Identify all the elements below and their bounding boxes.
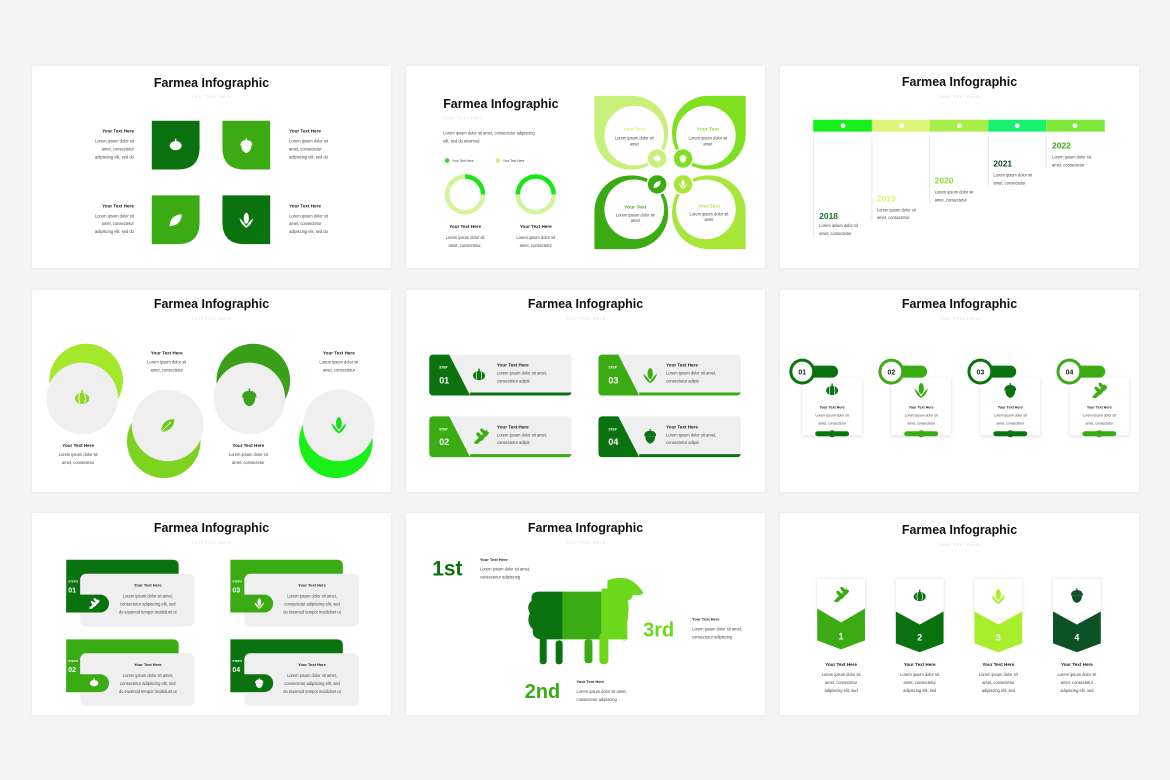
- text blocks: Lorem ipsum dolor sit: [95, 139, 135, 144]
- 1st label: Your Text Here: [480, 557, 508, 562]
- 3rd label: Your Text Here: [692, 616, 720, 621]
- year descriptions: amet, consectetur: [935, 197, 968, 202]
- legend: Your Text Here: [503, 159, 525, 163]
- title: [154, 521, 269, 545]
- step 03: 03: [232, 588, 240, 595]
- tile: leaf: [152, 195, 200, 244]
- badge 3: amet, consectetur: [982, 680, 1015, 685]
- card 03: 03: [608, 376, 618, 386]
- slide 5: step cards: [406, 290, 765, 492]
- step 01: [66, 560, 195, 626]
- donut 2: [518, 176, 554, 212]
- badge 2: Your Text Here: [904, 662, 936, 667]
- item 04: Your Text Here: [1087, 405, 1112, 409]
- flower: [594, 96, 746, 249]
- flower: Your Text: [624, 204, 647, 210]
- intro text: [443, 131, 535, 144]
- title: Your Text Here: [565, 316, 606, 321]
- card 02: 02: [439, 437, 449, 447]
- 2nd label: Your Text Here: [577, 679, 605, 684]
- card 04: Lorem ipsum dolor sit amet,: [666, 432, 716, 437]
- card 01: 01: [439, 376, 449, 386]
- text blocks: Lorem ipsum dolor sit: [95, 213, 135, 218]
- card 02: Your Text Here: [497, 424, 529, 429]
- item 01: [791, 360, 862, 437]
- labels: Lorem ipsum dolor sit: [59, 452, 98, 457]
- years: 2022: [1052, 141, 1071, 151]
- slide 1: leaf tiles: Lorem ipsum dolor sit: [289, 213, 329, 218]
- circle 1: [46, 344, 123, 434]
- card 04: [598, 416, 741, 457]
- badge 2: 2: [917, 632, 922, 642]
- labels: Your Text Here: [62, 443, 95, 448]
- 1st label: 1st: [432, 558, 462, 581]
- title: [154, 76, 269, 99]
- title: [528, 297, 643, 321]
- year descriptions: amet, consectetur: [993, 180, 1026, 185]
- donut labels: Lorem ipsum dolor sit: [446, 235, 485, 240]
- badge 1: adipiscing elit, sed: [824, 688, 858, 693]
- year descriptions: Lorem ipsum dolor sit: [935, 189, 974, 194]
- title: Farmea Infographic: [154, 521, 269, 535]
- year descriptions: amet, consectetur: [819, 231, 852, 236]
- card 02: Lorem ipsum dolor sit amet,: [497, 432, 547, 437]
- year descriptions: Lorem ipsum dolor sit: [877, 207, 917, 212]
- title: [154, 297, 269, 321]
- flower: Lorem ipsum dolor sit: [688, 136, 728, 141]
- title: [443, 97, 559, 121]
- badge 3: adipiscing elit, sed: [982, 688, 1015, 693]
- legend: [445, 158, 525, 163]
- 3rd label: Lorem ipsum dolor sit amet,: [692, 626, 742, 631]
- title: [902, 75, 1017, 99]
- years: 2020: [935, 175, 954, 185]
- item 02: Your Text Here: [909, 405, 934, 409]
- donut labels: Your Text Here: [520, 224, 552, 229]
- step 04: Your Text Here: [298, 662, 327, 667]
- slide 8: sheep ranking: [406, 513, 765, 715]
- text blocks: Your Text Here: [102, 129, 134, 134]
- text blocks: amet, consectetur: [102, 147, 135, 152]
- title: Farmea Infographic: [154, 297, 269, 311]
- slide 1: leaf tiles: Your Text Here: [289, 203, 321, 208]
- slide 1: leaf tiles: [32, 66, 391, 268]
- labels: Your Text Here: [323, 351, 355, 356]
- badge 2: adipiscing elit, sed: [903, 688, 936, 693]
- slide 1: leaf tiles: amet, consectetur: [289, 221, 322, 226]
- flower: Lorem ipsum dolor sit: [616, 212, 656, 217]
- step 01: Your Text Here: [134, 583, 162, 588]
- item 01: 01: [798, 370, 806, 377]
- donut 1: [447, 176, 483, 212]
- circle 4: [299, 390, 375, 478]
- slide 9: chevron badges: [780, 513, 1139, 715]
- step 03: do eiusmod tempor incididunt ut: [283, 610, 342, 615]
- labels: amet, consectetur: [232, 460, 265, 465]
- badge 1: [817, 579, 865, 693]
- labels: Your Text Here: [151, 351, 183, 356]
- card 03: consectetur adipis: [666, 379, 699, 384]
- card 03: Your Text Here: [666, 363, 698, 368]
- title: Your Text Here: [443, 116, 484, 121]
- slide 1: leaf tiles: adipiscing elit, sed do: [289, 155, 329, 160]
- title: Your Text Here: [939, 542, 980, 547]
- step 04: consectetur adipiscing elit, sed: [284, 681, 340, 686]
- card 03: [598, 355, 741, 395]
- labels: amet, consectetur: [323, 368, 356, 373]
- item 04: amet, consectetur: [1086, 421, 1114, 425]
- step 03: STEPS: [232, 580, 242, 584]
- title: Farmea Infographic: [902, 75, 1017, 89]
- 2nd label: 2nd: [525, 681, 560, 703]
- title: Farmea Infographic: [902, 297, 1017, 311]
- step 01: STEPS: [68, 580, 78, 584]
- card 01: [429, 355, 572, 395]
- item 01: Lorem ipsum dolor sit: [816, 413, 849, 417]
- slide 1: leaf tiles: amet, consectetur: [289, 147, 322, 152]
- flower: amet: [630, 142, 640, 147]
- slide 3: timeline: [780, 66, 1139, 268]
- card 02: [429, 416, 572, 457]
- badge 4: 4: [1074, 632, 1079, 642]
- circle 3: [213, 344, 290, 434]
- step 01: consectetur adipiscing elit, sed: [120, 602, 175, 607]
- title: Your Text Here: [191, 316, 232, 321]
- step 02: Lorem ipsum dolor sit amet,: [123, 673, 173, 678]
- flower: amet: [704, 217, 714, 222]
- badge 1: Lorem ipsum dolor sit: [822, 672, 861, 677]
- card 04: Your Text Here: [666, 424, 698, 429]
- badge 2: amet, consectetur: [904, 680, 936, 685]
- card 02: consectetur adipis: [497, 440, 530, 445]
- flower: Your Text: [698, 203, 720, 209]
- 1st label: consectetur adipiscing: [480, 575, 520, 580]
- title: Your Text Here: [191, 540, 232, 545]
- step 01: 01: [68, 588, 76, 595]
- step 02: consectetur adipiscing elit, sed: [120, 681, 175, 686]
- timeline bar: [813, 120, 1105, 132]
- flower: Lorem ipsum dolor sit: [615, 136, 655, 141]
- intro text: Lorem ipsum dolor sit amet, consectetur adipiscing: [443, 131, 535, 136]
- step 03: Lorem ipsum dolor sit amet,: [287, 594, 337, 599]
- title: [902, 297, 1017, 321]
- labels: amet, consectetur: [62, 460, 95, 465]
- labels: [59, 351, 359, 465]
- step 03: [230, 560, 359, 626]
- legend: Your Text Here: [452, 159, 474, 163]
- 1st label: Lorem ipsum dolor sit amet,: [480, 567, 530, 572]
- card 04: STEP: [608, 427, 618, 431]
- badge 1: Your Text Here: [825, 662, 857, 667]
- labels: Lorem ipsum dolor sit: [229, 452, 269, 457]
- slide 1: leaf tiles: Your Text Here: [289, 129, 321, 134]
- donut labels: amet, consectetur,: [448, 243, 482, 248]
- title: Your Text Here: [939, 316, 980, 321]
- item 02: amet, consectetur: [907, 421, 936, 425]
- year descriptions: [819, 155, 1092, 236]
- 2nd label: Lorem ipsum dolor sit amet,: [577, 689, 627, 694]
- slide 4: circles: [32, 290, 391, 492]
- donut labels: Lorem ipsum dolor sit: [516, 235, 556, 240]
- step 02: Your Text Here: [134, 662, 162, 667]
- labels: Lorem ipsum dolor sit: [319, 360, 359, 365]
- step 03: Your Text Here: [298, 583, 327, 588]
- 3rd label: consectetur adipiscing: [692, 634, 732, 639]
- slide 1: leaf tiles: adipiscing elit, sed do: [289, 229, 329, 234]
- step 04: STEPS: [232, 659, 242, 663]
- slide 7: stacked step cards: [32, 513, 391, 715]
- badge 4: adipiscing elit, sed: [1060, 688, 1094, 693]
- year descriptions: Lorem ipsum dolor sit: [819, 223, 859, 228]
- item 03: [969, 360, 1040, 437]
- step 03: consectetur adipiscing elit, sed: [284, 602, 340, 607]
- years: 2018: [819, 211, 838, 221]
- card 03: Lorem ipsum dolor sit amet,: [666, 371, 716, 376]
- step 02: STEPS: [68, 659, 78, 663]
- card 01: Your Text Here: [497, 363, 529, 368]
- step 04: do eiusmod tempor incididunt ut: [283, 689, 342, 694]
- step 04: [230, 639, 359, 706]
- title: [528, 521, 643, 545]
- badge 3: 3: [996, 632, 1001, 642]
- timeline lines: [813, 136, 1046, 238]
- card 01: STEP: [439, 366, 449, 370]
- title: Farmea Infographic: [528, 521, 643, 535]
- flower: Your Text: [623, 127, 646, 133]
- 1st label: [432, 557, 530, 581]
- item 02: [880, 360, 951, 437]
- slide 6: numbered pins: [780, 290, 1139, 492]
- item 01: amet, consectetur: [818, 421, 847, 425]
- year descriptions: Lorem ipsum dolor sit: [993, 172, 1033, 177]
- labels: Your Text Here: [232, 443, 265, 448]
- step 04: Lorem ipsum dolor sit amet,: [287, 673, 337, 678]
- tile: acorn: [222, 121, 270, 169]
- item 02: 02: [887, 370, 895, 377]
- year descriptions: Lorem ipsum dolor sit: [1052, 155, 1092, 160]
- title: Farmea Infographic: [154, 76, 269, 90]
- 3rd label: [643, 616, 742, 641]
- years: 2021: [993, 159, 1012, 169]
- year descriptions: amet, consectetur: [1052, 163, 1085, 168]
- slide 2: flower & donuts: [406, 66, 765, 268]
- labels: Lorem ipsum dolor sit: [147, 360, 187, 365]
- item 02: Lorem ipsum dolor sit: [905, 413, 938, 417]
- text blocks: Your Text Here: [102, 203, 134, 208]
- step 02: do eiusmod tempor incididunt ut: [119, 689, 177, 694]
- 3rd label: 3rd: [643, 619, 674, 641]
- slide 1: leaf tiles: Lorem ipsum dolor sit: [289, 139, 329, 144]
- 2nd label: consectetur adipiscing: [577, 697, 617, 702]
- badge 3: Your Text Here: [982, 662, 1015, 667]
- badge 3: [974, 579, 1022, 693]
- item 03: 03: [977, 370, 984, 377]
- text blocks: [95, 129, 135, 234]
- badge 2: Lorem ipsum dolor sit: [900, 672, 940, 677]
- item 04: Lorem ipsum dolor sit: [1083, 413, 1116, 417]
- title: Farmea Infographic: [528, 297, 643, 311]
- title: Farmea Infographic: [443, 97, 559, 111]
- donut labels: [446, 224, 556, 248]
- donut labels: amet, consectetur: [520, 243, 553, 248]
- badge 4: Lorem ipsum dolor sit: [1057, 672, 1097, 677]
- tile: corn: [222, 195, 270, 244]
- tile: pumpkin: [152, 121, 200, 169]
- step 04: 04: [232, 667, 240, 674]
- sheep: [528, 578, 643, 664]
- title: Your Text Here: [565, 540, 606, 545]
- years: 2019: [877, 193, 896, 203]
- item 03: Lorem ipsum dolor sit: [994, 413, 1027, 417]
- badge 1: 1: [839, 631, 844, 641]
- item 01: Your Text Here: [820, 405, 845, 409]
- flower: amet: [631, 218, 641, 223]
- badge 3: Lorem ipsum dolor sit: [979, 672, 1019, 677]
- labels: amet, consectetur: [151, 368, 184, 373]
- card 04: consectetur adipis: [666, 440, 699, 445]
- step 01: Lorem ipsum dolor sit amet,: [123, 594, 173, 599]
- flower: amet: [703, 142, 713, 147]
- card 01: Lorem ipsum dolor sit amet,: [497, 371, 547, 376]
- year descriptions: amet, consectetur: [877, 215, 910, 220]
- title: Your Text Here: [191, 94, 232, 99]
- intro text: elit, sed do eiusmod.: [443, 139, 480, 144]
- circle 2: [127, 390, 204, 478]
- text blocks: adipiscing elit, sed do: [95, 229, 135, 234]
- card 01: consectetur adipis: [497, 379, 530, 384]
- title: [902, 523, 1017, 547]
- donut labels: Your Text Here: [449, 224, 481, 229]
- badge 4: amet, consectetur: [1061, 680, 1094, 685]
- card 03: STEP: [608, 366, 618, 370]
- item 04: [1058, 360, 1129, 437]
- years: [819, 141, 1071, 221]
- card 02: STEP: [439, 427, 449, 431]
- text blocks: amet, consectetur: [102, 221, 135, 226]
- badge 4: Your Text Here: [1061, 662, 1093, 667]
- item 03: Your Text Here: [998, 405, 1023, 409]
- step 01: do eiusmod tempor incididunt ut: [119, 610, 177, 615]
- badge 4: [1053, 579, 1101, 693]
- step 02: [66, 639, 195, 706]
- title: Farmea Infographic: [902, 523, 1017, 537]
- badge 1: amet, consectetur: [825, 680, 858, 685]
- 2nd label: [525, 679, 627, 703]
- flower: Your Text: [697, 127, 719, 133]
- flower: Lorem ipsum dolor sit: [689, 211, 729, 216]
- item 03: amet, consectetur: [996, 421, 1025, 425]
- card 04: 04: [608, 437, 618, 447]
- text blocks: adipiscing elit, sed do: [95, 155, 135, 160]
- badge 2: [896, 579, 944, 693]
- step 02: 02: [68, 667, 76, 674]
- item 04: 04: [1066, 370, 1073, 377]
- title: Your Text Here: [939, 94, 980, 99]
